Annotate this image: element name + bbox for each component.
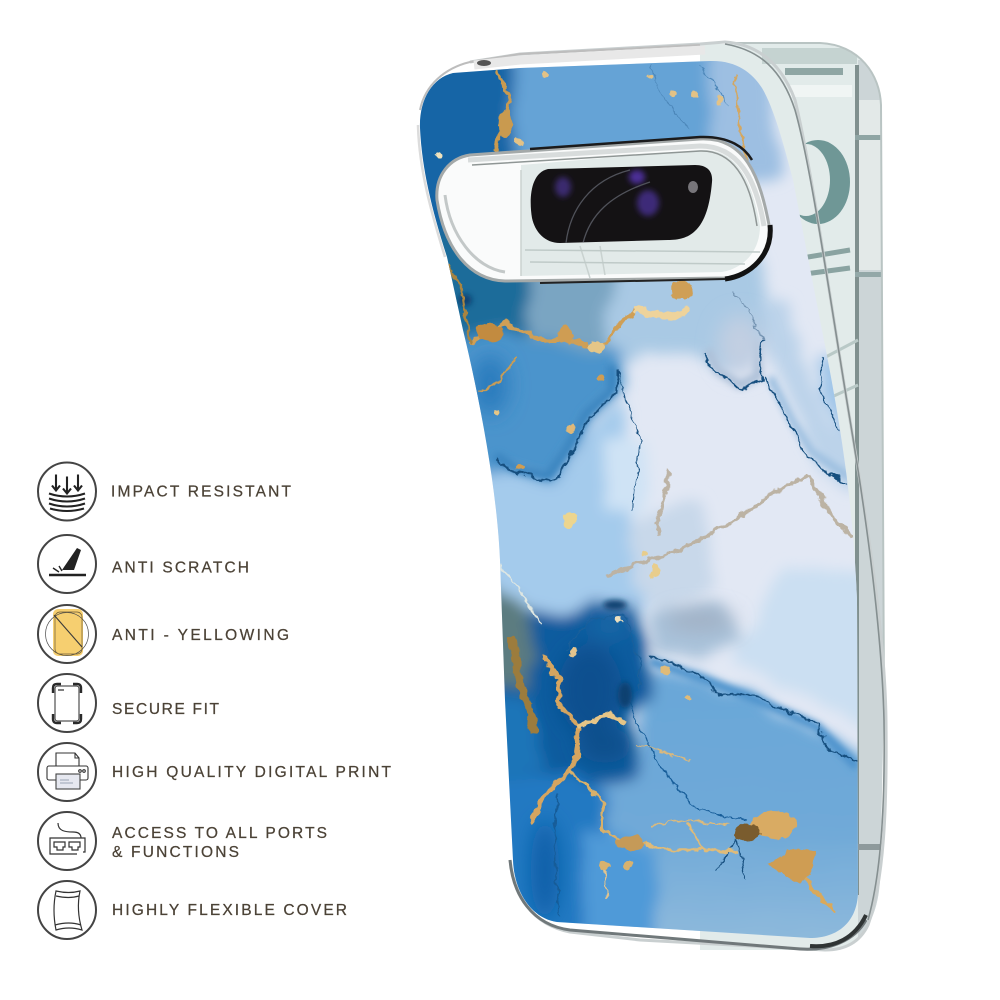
icon: impact arrows <box>38 462 96 520</box>
phone back edge <box>735 43 884 700</box>
label second line: & FUNCTIONS <box>112 844 239 861</box>
icon: blade scratch <box>38 535 96 593</box>
dark ink pools <box>458 294 632 708</box>
marble back panel <box>420 61 858 938</box>
ink shadows <box>472 315 762 920</box>
feature: impact resistant <box>38 462 292 520</box>
camera lens <box>530 165 712 243</box>
icon: bent case <box>38 881 96 939</box>
label: HIGH QUALITY DIGITAL PRINT <box>112 764 392 781</box>
marble colour masses <box>420 61 858 938</box>
vein edge shading <box>495 340 857 767</box>
feature: digital print <box>38 743 392 801</box>
camera rim <box>437 137 770 283</box>
label: ACCESS TO ALL PORTS <box>112 825 327 842</box>
gold splashes <box>435 72 815 885</box>
feature: anti scratch <box>38 535 249 593</box>
label: HIGHLY FLEXIBLE COVER <box>112 902 347 919</box>
feature: anti yellowing <box>38 605 289 663</box>
feature: ports and functions <box>38 812 327 870</box>
camera surround <box>437 139 770 281</box>
gold veins <box>448 72 850 910</box>
feature: secure fit <box>38 674 220 732</box>
feature: flexible cover <box>38 881 347 939</box>
case outer edge <box>418 42 886 950</box>
icon: fitted phone <box>38 674 96 732</box>
camera cutout <box>437 137 770 283</box>
icon: ports <box>38 812 96 870</box>
icon: yellow phone <box>38 605 96 663</box>
back phone body <box>700 40 890 955</box>
label: SECURE FIT <box>112 701 220 718</box>
icon: printer <box>38 743 96 801</box>
camera window tint <box>521 150 760 276</box>
dark ink veins <box>495 65 857 915</box>
label: IMPACT RESISTANT <box>111 484 292 500</box>
label: ANTI - YELLOWING <box>112 627 289 644</box>
label: ANTI SCRATCH <box>112 560 249 576</box>
features list <box>38 462 392 939</box>
